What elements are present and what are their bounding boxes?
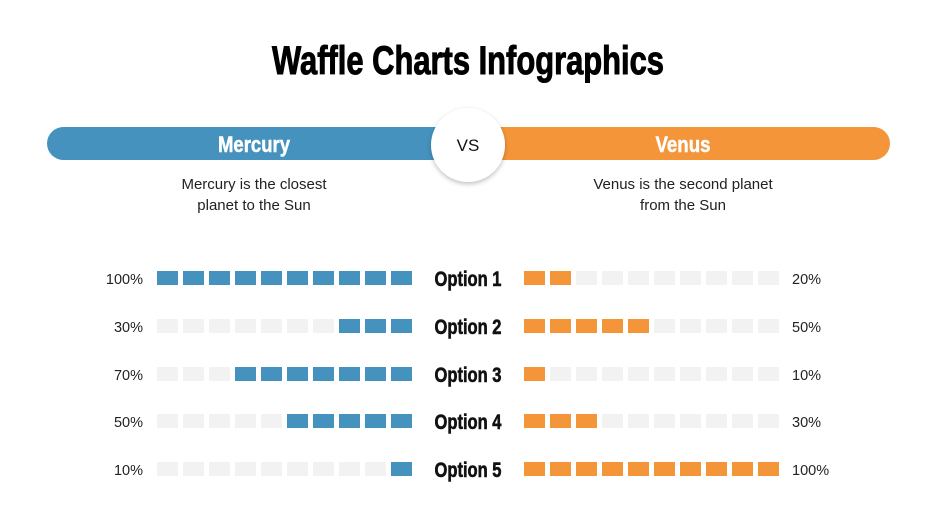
vs circle bbox=[431, 108, 505, 182]
title: Waffle Charts Infographics bbox=[272, 39, 664, 83]
header bar: Venus: Venus bbox=[656, 132, 710, 157]
row 5: 100% bbox=[792, 463, 829, 479]
row 4: 50% bbox=[114, 415, 143, 431]
description: Mercury: Mercury is the closest bbox=[181, 176, 327, 193]
description: Venus: Venus is the second planet bbox=[593, 176, 773, 193]
row 5: 10% bbox=[114, 463, 143, 479]
row 5: Option 5 bbox=[434, 459, 502, 482]
vs circle: VS bbox=[457, 136, 479, 155]
row 1: 20% bbox=[792, 272, 821, 288]
row 4: Option 4 bbox=[434, 411, 502, 434]
row 4 bbox=[114, 411, 821, 434]
row 1: 100% bbox=[106, 272, 143, 288]
row 1: Option 1 bbox=[434, 268, 502, 291]
row 2 bbox=[114, 316, 821, 339]
row 3: 70% bbox=[114, 368, 143, 384]
header bar: Mercury bbox=[47, 127, 487, 160]
row 3: 10% bbox=[792, 368, 821, 384]
row 3 bbox=[114, 364, 821, 387]
header bar: Mercury: Mercury bbox=[218, 132, 291, 157]
description: Mercury: planet to the Sun bbox=[197, 197, 311, 214]
row 2: 50% bbox=[792, 320, 821, 336]
row 2: 30% bbox=[114, 320, 143, 336]
row 3: Option 3 bbox=[434, 364, 502, 387]
row 2: Option 2 bbox=[434, 316, 502, 339]
row 4: 30% bbox=[792, 415, 821, 431]
row 5 bbox=[114, 459, 829, 482]
description: Venus: from the Sun bbox=[640, 197, 726, 214]
header bar: Venus bbox=[450, 127, 890, 160]
row 1 bbox=[106, 268, 821, 291]
